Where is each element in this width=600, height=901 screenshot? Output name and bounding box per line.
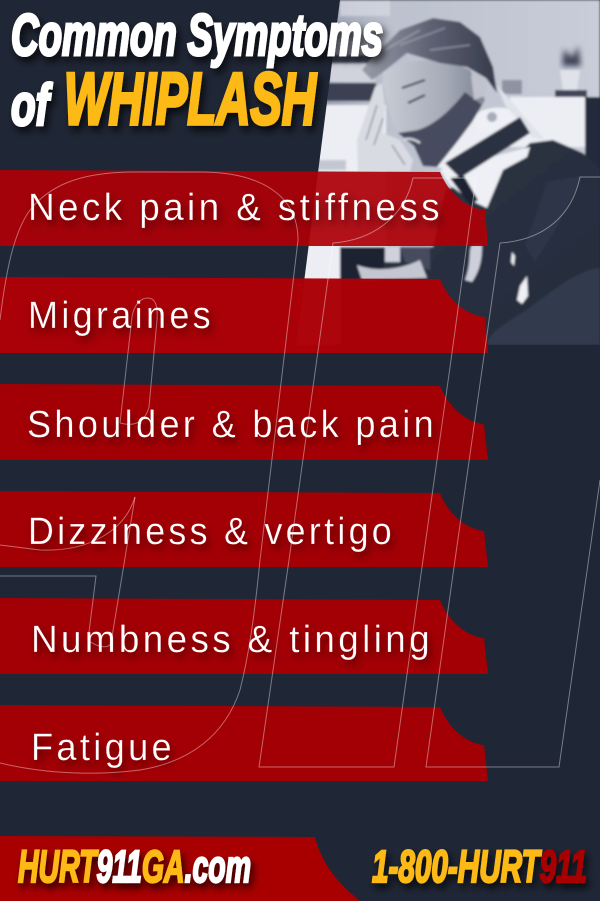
symptom bar: Shoulder & back pain: Shoulder & back pain — [27, 404, 437, 446]
watermark: outlined 911 — [0, 172, 600, 773]
symptom bar: Numbness & tingling: Numbness & tingling — [31, 619, 433, 661]
title — [11, 3, 383, 140]
title line: Common Symptoms: Common Symptoms — [11, 3, 383, 68]
neck — [436, 120, 509, 170]
hair — [362, 18, 497, 93]
symptom bar: Neck pain & stiffness: Neck pain & stiffness — [28, 187, 443, 229]
symptom bar: Numbness & tingling — [0, 598, 488, 674]
symptom bar: Migraines — [0, 277, 488, 353]
title line: WHIPLASH: WHIPLASH — [64, 59, 317, 140]
face — [383, 60, 486, 130]
symptom bar: Fatigue — [0, 705, 488, 781]
photo: man in neck brace holding his head — [296, 0, 600, 345]
hand — [357, 83, 413, 172]
beard — [398, 92, 482, 167]
symptom bar: Shoulder & back pain — [0, 384, 488, 460]
jacket — [340, 140, 600, 345]
symptom bar: Migraines: Migraines — [28, 295, 214, 337]
symptom bar: Dizziness & vertigo — [0, 491, 488, 567]
symptom bar: Dizziness & vertigo: Dizziness & vertigo — [28, 511, 395, 553]
title line: of: of — [11, 73, 53, 138]
footer website: HURT911GA.com — [18, 841, 251, 892]
ear — [470, 74, 484, 102]
symptom bar: Fatigue: Fatigue — [31, 727, 175, 769]
footer red tab — [0, 836, 360, 901]
brace — [474, 106, 511, 124]
symptom bar: Neck pain & stiffness — [0, 170, 488, 246]
shirt — [440, 147, 530, 208]
